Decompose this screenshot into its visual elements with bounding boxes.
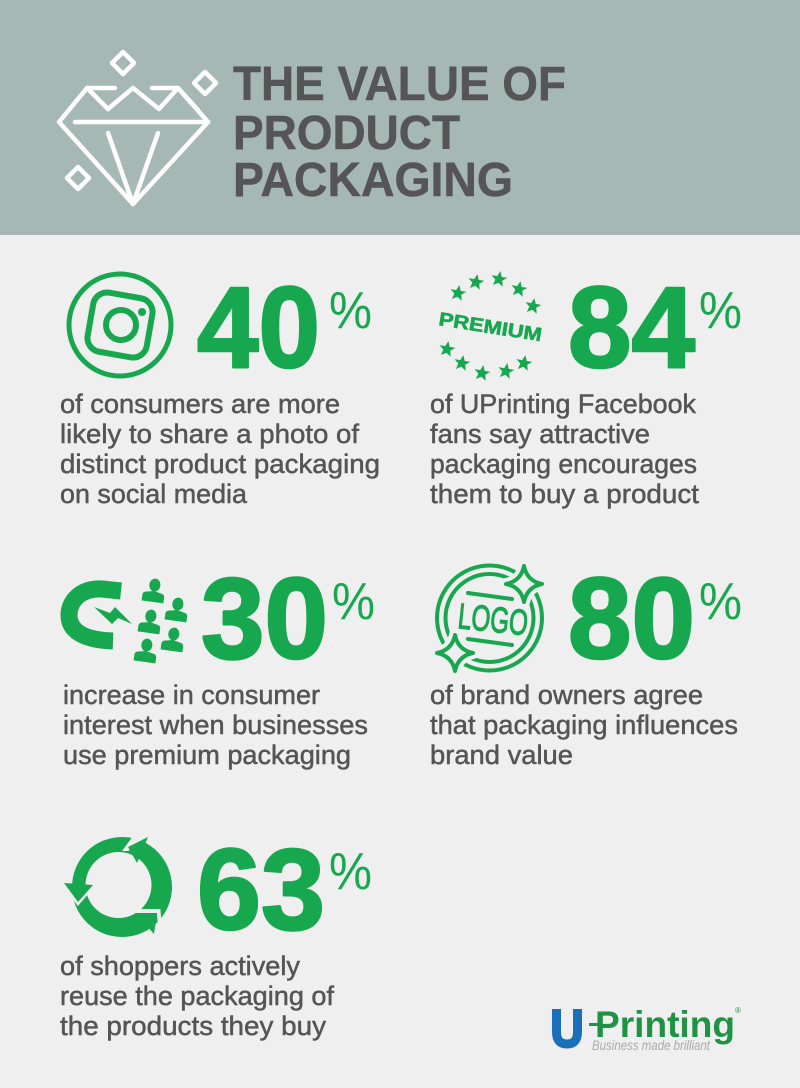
icon: premium badge: PREMIUM xyxy=(437,309,543,346)
number: 63 xyxy=(197,826,325,954)
number: 40 xyxy=(197,264,320,392)
description: likely to share a photo of xyxy=(60,419,359,449)
title: THE VALUE OF xyxy=(233,58,566,111)
description: of consumers are more xyxy=(60,389,340,419)
description: reuse the packaging of xyxy=(60,981,334,1011)
header band xyxy=(0,0,800,235)
stat: 30% xyxy=(63,555,375,770)
description: of shoppers actively xyxy=(60,951,301,981)
description xyxy=(63,680,368,770)
title: PACKAGING xyxy=(233,154,513,207)
percent sign: % xyxy=(329,282,372,340)
UPrinting logo: Printing xyxy=(595,1004,735,1045)
UPrinting logo: Business made brilliant xyxy=(592,1037,711,1053)
description: use premium packaging xyxy=(63,740,351,770)
UPrinting logo: ® xyxy=(735,1006,741,1015)
icon: logo stamp xyxy=(437,566,542,671)
icon: premium badge xyxy=(437,270,543,381)
description: distinct product packaging xyxy=(60,449,380,479)
description: brand value xyxy=(430,740,573,770)
description xyxy=(430,389,700,509)
icon: logo stamp: LOGO xyxy=(456,595,530,643)
number: 84 xyxy=(568,264,695,392)
icon: recycle arrows xyxy=(64,832,172,937)
stat: 80% xyxy=(430,555,742,770)
title xyxy=(233,58,566,207)
description: the products they buy xyxy=(60,1011,327,1041)
percent sign: % xyxy=(329,843,372,901)
description: fans say attractive xyxy=(430,419,650,449)
UPrinting logo xyxy=(556,1004,741,1053)
description: interest when businesses xyxy=(63,710,368,740)
percent sign: % xyxy=(699,573,742,631)
title: PRODUCT xyxy=(233,107,460,160)
icon: magnet attracting people xyxy=(69,577,190,663)
description xyxy=(60,951,334,1041)
icon: instagram xyxy=(69,274,171,376)
description xyxy=(60,389,380,509)
description xyxy=(430,680,738,770)
stat: 63% xyxy=(60,826,372,1041)
description: that packaging influences xyxy=(430,710,738,740)
icon: diamond xyxy=(59,52,216,204)
number: 80 xyxy=(568,555,695,683)
number: 30 xyxy=(201,555,328,683)
description: them to buy a product xyxy=(430,479,700,509)
description: packaging encourages xyxy=(430,449,697,479)
description: on social media xyxy=(60,479,248,509)
stat: 40% xyxy=(60,264,380,509)
percent sign: % xyxy=(699,282,742,340)
description: increase in consumer xyxy=(63,680,320,710)
description: of UPrinting Facebook xyxy=(430,389,696,419)
stat: 84% xyxy=(430,264,742,509)
percent sign: % xyxy=(332,573,375,631)
description: of brand owners agree xyxy=(430,680,703,710)
